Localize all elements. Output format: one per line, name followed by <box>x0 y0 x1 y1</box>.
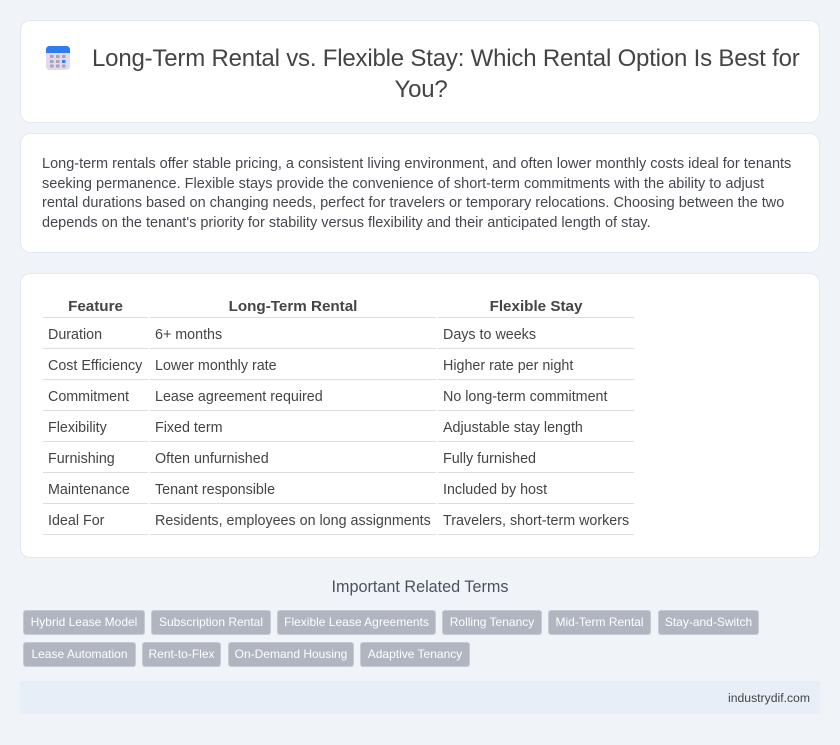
table row: maintenance: Maintenance <box>48 482 130 498</box>
table row: duration: Days to weeks <box>443 327 536 343</box>
tag <box>23 610 145 635</box>
tag <box>360 642 470 667</box>
heading: related terms: Important Related Terms <box>332 578 508 596</box>
table row: ideal for <box>43 513 634 535</box>
title: You? <box>394 76 448 103</box>
table row: cost efficiency: Cost Efficiency <box>48 358 142 374</box>
tag: Hybrid Lease Model <box>31 615 137 629</box>
table row: duration: 6+ months <box>155 327 222 343</box>
title <box>92 45 800 103</box>
table row: furnishing: Fully furnished <box>443 451 536 467</box>
table row: furnishing <box>43 451 634 473</box>
table row: duration: Duration <box>48 327 102 343</box>
table row: flexibility: Adjustable stay length <box>443 420 583 436</box>
text block: introduction paragraph: rental durations based on changing needs, perfect for travelers or temporary relocations. Choosing between the two <box>42 195 784 211</box>
panel: comparison table <box>20 273 820 558</box>
tag: Stay-and-Switch <box>665 615 752 629</box>
table row: ideal for: Ideal For <box>48 513 104 529</box>
table row: furnishing: Often unfurnished <box>155 451 269 467</box>
tag <box>658 610 759 635</box>
footer source text: industrydif.com <box>728 691 810 705</box>
text block: introduction paragraph: seeking permanence. Flexible stays provide the convenience of short-term commitments with the ability to adjust <box>42 176 764 192</box>
table header row: Flexible Stay <box>490 298 582 315</box>
tag: Mid-Term Rental <box>555 615 644 629</box>
table row: maintenance: Included by host <box>443 482 547 498</box>
tag <box>228 642 354 667</box>
table header row: Feature <box>68 298 123 315</box>
table row: commitment: Lease agreement required <box>155 389 323 405</box>
table row: flexibility: Fixed term <box>155 420 223 436</box>
footer bar <box>20 681 820 714</box>
panel: title header <box>20 20 820 123</box>
table row: flexibility: Flexibility <box>48 420 107 436</box>
table row: cost efficiency <box>43 358 634 380</box>
text block: introduction paragraph: Long-term rentals offer stable pricing, a consistent living environment, and often lower monthly costs ideal for tenants <box>42 156 791 172</box>
icon: calendar <box>46 46 70 70</box>
panel: introduction <box>20 133 820 253</box>
table row: cost efficiency: Lower monthly rate <box>155 358 277 374</box>
title: Long-Term Rental vs. Flexible Stay: Which Rental Option Is Best for <box>92 45 800 72</box>
table row: commitment: Commitment <box>48 389 129 405</box>
table row: commitment <box>43 389 634 411</box>
table row: duration <box>43 327 634 349</box>
tag <box>442 610 542 635</box>
tag: On-Demand Housing <box>235 647 347 661</box>
tag: Flexible Lease Agreements <box>284 615 429 629</box>
tag <box>23 642 136 667</box>
table row: cost efficiency: Higher rate per night <box>443 358 573 374</box>
tag <box>142 642 221 667</box>
related term tags <box>23 610 759 667</box>
tag <box>277 610 436 635</box>
table row: furnishing: Furnishing <box>48 451 115 467</box>
text block: introduction paragraph: depends on the tenant's priority for stability versus flexibility and their anticipated length of stay. <box>42 215 651 231</box>
table row: commitment: No long-term commitment <box>443 389 607 405</box>
table row: ideal for: Travelers, short-term workers <box>443 513 629 529</box>
tag: Subscription Rental <box>159 615 263 629</box>
table row: maintenance <box>43 482 634 504</box>
tag: Rolling Tenancy <box>450 615 534 629</box>
tag: Lease Automation <box>31 647 128 661</box>
table header row <box>43 298 634 318</box>
text block: introduction paragraph <box>42 156 791 231</box>
table row: flexibility <box>43 420 634 442</box>
tag <box>548 610 651 635</box>
table header row: Long-Term Rental <box>229 298 357 315</box>
tag: Rent-to-Flex <box>148 647 215 661</box>
table row: maintenance: Tenant responsible <box>155 482 275 498</box>
tag <box>151 610 271 635</box>
tag: Adaptive Tenancy <box>368 647 462 661</box>
table row: ideal for: Residents, employees on long assignments <box>155 513 431 529</box>
